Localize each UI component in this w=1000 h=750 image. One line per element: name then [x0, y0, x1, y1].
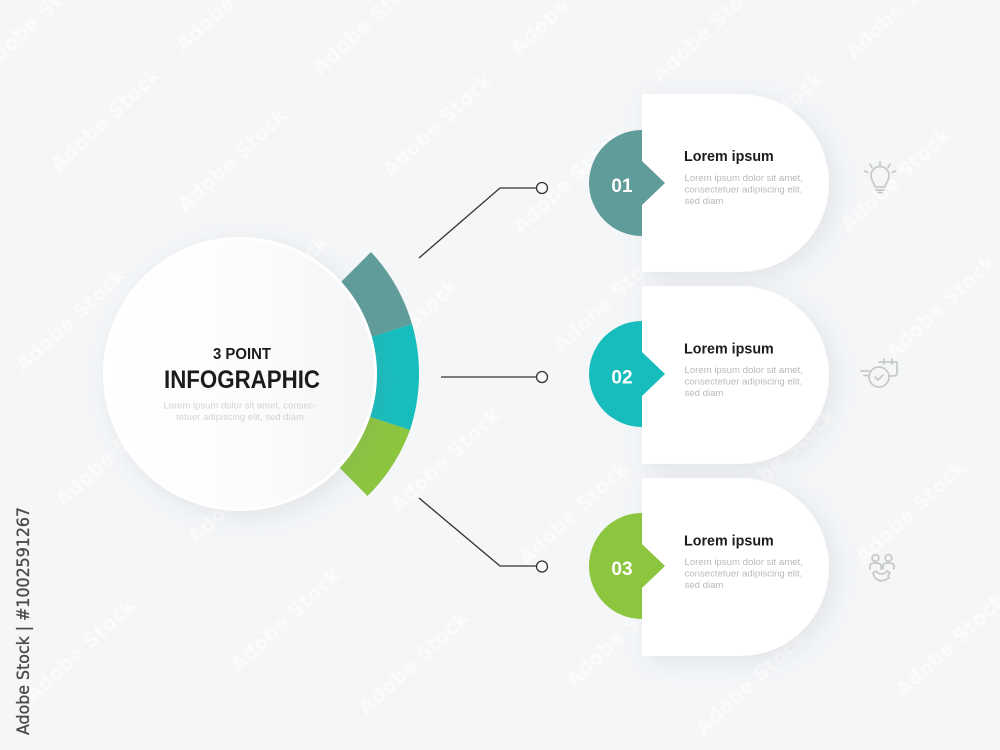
card text: [684, 557, 803, 591]
card text: consectetuer adipiscing elit,: [684, 376, 802, 388]
card text: sed diam: [684, 196, 723, 207]
connector 3: [419, 498, 548, 572]
card text: Lorem ipsum dolor sit amet,: [684, 365, 803, 376]
watermarks: Adobe Stock: [507, 124, 628, 239]
watermarks: Adobe Stock: [377, 67, 498, 182]
watermarks: Adobe Stock: [10, 262, 131, 377]
center description: tetuer adipiscing elit, sed diam: [176, 412, 304, 423]
badge 03: [589, 513, 665, 619]
center circle: [104, 238, 376, 510]
watermarks: Adobe Stock: [182, 434, 303, 549]
badge 02: [589, 321, 665, 427]
watermarks: Adobe Stock: [50, 397, 171, 512]
card panel: [642, 478, 829, 656]
card text: consectetuer adipiscing elit,: [684, 568, 802, 580]
watermarks: Adobe Stock: [707, 65, 828, 180]
card panel: [642, 286, 829, 464]
segment: cyan: [355, 324, 419, 430]
center description: [163, 400, 317, 423]
card text: sed diam: [684, 580, 723, 591]
watermarks: Adobe Stock: [690, 625, 811, 740]
card text: Lorem ipsum dolor sit amet,: [684, 557, 803, 568]
card text: [684, 173, 803, 207]
card text: consectetuer adipiscing elit,: [684, 184, 802, 196]
watermarks: Adobe Stock: [225, 562, 346, 677]
watermarks: Adobe Stock: [213, 229, 334, 344]
card 2: [589, 286, 829, 464]
watermarks: Adobe Stock: [835, 122, 956, 237]
card 3: [589, 478, 829, 656]
watermarks: Adobe Stock: [880, 249, 1000, 364]
segment: green: [322, 412, 410, 496]
watermarks: Adobe Stock: [45, 62, 166, 177]
center text: [163, 346, 320, 423]
watermarks: Adobe Stock: [680, 289, 801, 404]
stock id label: Adobe Stock | #1002591267: [14, 507, 34, 735]
number 03: 03: [611, 559, 633, 580]
card title: Lorem ipsum: [684, 149, 774, 165]
watermarks: Adobe Stock: [560, 577, 681, 692]
connector 2: [441, 372, 548, 382]
center description: Lorem ipsum dolor sit amet, consec-: [163, 400, 317, 412]
segment: teal: [322, 252, 412, 342]
heading: infographic: INFOGRAPHIC: [164, 366, 320, 394]
card title: Lorem ipsum: [684, 342, 774, 358]
number 02: 02: [611, 368, 633, 388]
watermarks: Adobe Stock: [172, 102, 293, 217]
watermarks: Adobe Stock: [720, 402, 841, 517]
card text: sed diam: [684, 388, 723, 399]
card text: Lorem ipsum dolor sit amet,: [684, 173, 803, 184]
ring segments: [322, 252, 419, 496]
icon: clock and calendar: [861, 359, 897, 387]
card text: [684, 365, 803, 399]
watermarks: Adobe Stock: [850, 454, 971, 569]
watermarks: Adobe Stock: [20, 592, 141, 707]
watermarks: Adobe Stock: [548, 242, 669, 357]
connector 1: [419, 182, 548, 258]
badge 01: [589, 130, 665, 236]
watermarks: Adobe Stock: [513, 455, 634, 570]
icon: light bulb: [864, 162, 896, 192]
card panel: [642, 94, 829, 272]
number 01: 01: [611, 176, 633, 197]
card 1: [589, 94, 829, 272]
watermarks: Adobe Stock: [353, 605, 474, 720]
card title: Lorem ipsum: [684, 534, 774, 550]
heading: 3 point: 3 POINT: [213, 346, 271, 363]
watermarks: Adobe Stock: [343, 272, 464, 387]
watermarks: Adobe Stock: [385, 402, 506, 517]
icon: team and gear: [870, 555, 894, 581]
